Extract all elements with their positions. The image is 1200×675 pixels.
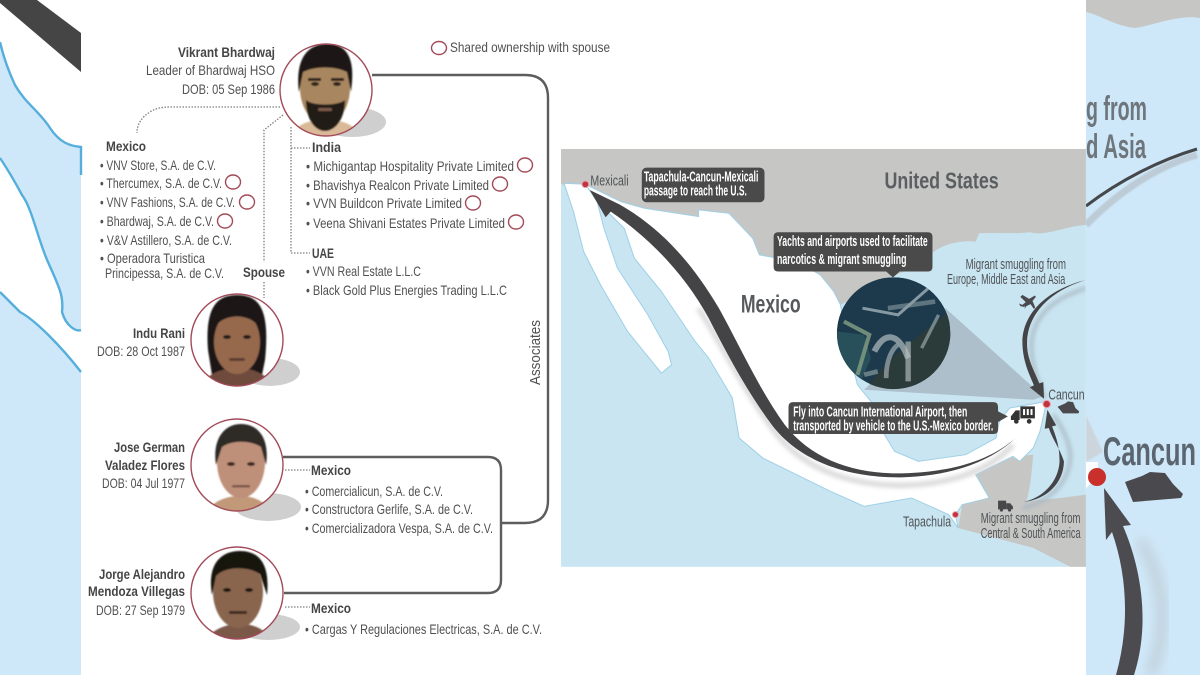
name and birth date: DOB: 27 Sep 1979 — [96, 602, 185, 618]
list: Valadez Mexico companies — [305, 462, 493, 536]
right background map strip — [1086, 0, 1200, 675]
list: Mexico companies: • Operadora Turistica — [100, 250, 205, 266]
portrait shadow — [240, 358, 300, 386]
portrait — [191, 294, 283, 390]
list: India companies: • VVN Buildcon Private Limited — [306, 195, 462, 211]
list: India companies: India — [312, 139, 341, 155]
callout: fly into Cancun: Fly into Cancun International Airport, then — [793, 404, 967, 420]
list: India companies: • Michigantap Hospitality Private Limited — [306, 158, 514, 174]
name and birth date: Jose German — [114, 439, 185, 455]
callout: yachts and airports: narcotics & migrant smuggling — [777, 252, 906, 268]
icon: truck with people — [1011, 406, 1035, 424]
name and role: DOB: 05 Sep 1986 — [182, 81, 275, 97]
callout: fly into Cancun — [788, 402, 1008, 435]
name and role: Vikrant Bhardwaj — [178, 44, 275, 60]
person: Jorge Alejandro Mendoza Villegas — [88, 547, 300, 642]
callout: yachts and airports — [774, 232, 932, 278]
label: Spouse: Spouse — [243, 264, 285, 280]
enlarged route curve — [1086, 149, 1197, 225]
list: Mexico companies: • VNV Fashions, S.A. de C.V. — [100, 194, 235, 210]
land: United States — [560, 149, 1086, 305]
list: Mexico companies: Principessa, S.A. de C.V. — [105, 265, 224, 281]
name and birth date: Jorge Alejandro — [99, 566, 185, 582]
name and birth date: Indu Rani — [133, 325, 185, 341]
list: India companies: • Veena Shivani Estates Private Limited — [306, 215, 505, 231]
list: Mexico companies: • Thercumex, S.A. de C.V. — [100, 175, 222, 191]
list: UAE companies: UAE — [312, 245, 334, 261]
callout: Tapachula-Cancun-Mexicali passage: passage to reach the U.S. — [644, 184, 747, 200]
portrait — [191, 419, 283, 515]
label: Tapachula: Tapachula — [903, 514, 952, 530]
list: Mendoza Mexico companies: • Cargas Y Regulaciones Electricas, S.A. de C.V. — [305, 621, 542, 637]
person: Indu Rani — [97, 294, 300, 390]
name and birth date — [97, 325, 185, 359]
list: India companies — [306, 139, 532, 231]
dotted connector: to India and UAE holdings — [291, 127, 310, 253]
callout: Tapachula-Cancun-Mexicali passage: Tapachula-Cancun-Mexicali — [644, 170, 758, 186]
icon: airplane — [1019, 295, 1036, 309]
label: migrant smuggling from Central and South America: Migrant smuggling from — [981, 511, 1081, 527]
connector: associates — [372, 75, 548, 523]
list: Valadez Mexico companies: • Comercialicun, S.A. de C.V. — [305, 483, 443, 499]
list: UAE companies: • Black Gold Plus Energies Trading L.L.C — [306, 282, 507, 298]
yacht callout beam — [864, 308, 1043, 400]
list: UAE companies: • VVN Real Estate L.L.C — [306, 263, 421, 279]
callout: fly into Cancun: transported by vehicle to the U.S.-Mexico border. — [793, 419, 993, 435]
panel: smuggling route map — [560, 149, 1086, 567]
label: Cancun: Cancun — [1048, 388, 1085, 404]
label: migrant smuggling from Europe, Middle East and Asia: Europe, Middle East and Asia — [947, 272, 1066, 288]
connector: Valadez and Mendoza — [283, 457, 501, 593]
callout: Tapachula-Cancun-Mexicali passage — [642, 168, 764, 202]
list: Valadez Mexico companies: • Comercializadora Vespa, S.A. de C.V. — [305, 520, 493, 536]
dotted connector: Mendoza to Mexico holdings — [285, 606, 310, 608]
portrait shadow — [236, 614, 300, 640]
list: Valadez Mexico companies: Mexico — [311, 462, 351, 478]
list: Mexico companies — [100, 138, 254, 281]
label: migrant smuggling from Europe, Middle East and Asia — [947, 257, 1066, 288]
label: Mexicali: Mexicali — [590, 174, 629, 190]
enlarged marker: Cancun — [1088, 468, 1106, 486]
legend: shared ownership with spouse: Shared ownership with spouse — [450, 39, 610, 55]
portrait — [191, 547, 283, 642]
name and birth date: Mendoza Villegas — [88, 583, 185, 599]
marker: Mexicali — [582, 181, 589, 188]
list: Mendoza Mexico companies — [305, 600, 542, 637]
name and birth date: Valadez Flores — [105, 457, 185, 473]
portrait shadow — [235, 493, 301, 521]
marker: Cancun — [1043, 400, 1050, 408]
sea — [560, 149, 1086, 567]
label: Mexico: Mexico — [741, 291, 801, 318]
name and birth date — [102, 439, 185, 491]
list: Mexico companies: • V&V Astillero, S.A. de C.V. — [100, 232, 232, 248]
list: Valadez Mexico companies: • Constructora Gerlife, S.A. de C.V. — [305, 501, 473, 517]
name and birth date — [88, 566, 185, 618]
icon: truck small — [998, 501, 1013, 512]
land: Central America — [958, 455, 1086, 567]
land: Baja California — [564, 183, 672, 373]
list: Mexico companies: Mexico — [106, 138, 146, 154]
portrait shadow — [318, 107, 386, 137]
photo: marina aerial view — [837, 277, 952, 390]
person: Vikrant Bhardwaj — [146, 44, 386, 140]
list: UAE companies — [306, 245, 507, 298]
enlarged arrow from south — [1104, 488, 1162, 675]
route arrow: Cancun to Mexicali — [590, 190, 1016, 485]
list: Mexico companies: • Bhardwaj, S.A. de C.V. — [100, 213, 214, 229]
list: Mendoza Mexico companies: Mexico — [311, 600, 351, 616]
dotted connector: Valadez to Mexico holdings — [285, 469, 310, 471]
route arrow: Europe, Middle East and Asia to Cancun — [1022, 280, 1086, 399]
portrait — [280, 44, 372, 140]
label: Associates: Associates — [527, 320, 544, 385]
name and role — [146, 44, 275, 97]
land: Mexico mainland — [585, 184, 1047, 528]
name and birth date: DOB: 28 Oct 1987 — [97, 343, 185, 359]
label: migrant smuggling from Central and South America: Central & South America — [981, 526, 1081, 542]
callout: yachts and airports: Yachts and airports used to facilitate — [777, 234, 928, 250]
enlarged label: Migrant smuggling fragment: g from — [1086, 90, 1147, 128]
enlarged icon: ship — [1125, 472, 1183, 502]
route arrow: Central and South America to Cancun — [1023, 410, 1070, 508]
marker: Tapachula — [952, 512, 959, 518]
enlarged label: Migrant smuggling fragment: d Asia — [1086, 128, 1147, 166]
left background map strip — [0, 0, 81, 675]
list: India companies: • Bhavishya Realcon Private Limited — [306, 177, 489, 193]
label: migrant smuggling from Central and South America — [981, 512, 1081, 538]
list: Mexico companies: • VNV Store, S.A. de C.V. — [100, 157, 216, 173]
person: Jose German Valadez Flores — [102, 419, 301, 521]
name and role: Leader of Bhardwaj HSO — [146, 62, 275, 78]
dotted connector: to Mexico holdings — [137, 107, 280, 133]
icon: ship — [1058, 401, 1079, 413]
dotted connector: to spouse — [264, 115, 283, 298]
enlarged label: Migrant smuggling fragment — [1086, 95, 1146, 158]
name and birth date: DOB: 04 Jul 1977 — [102, 475, 185, 491]
label: migrant smuggling from Europe, Middle East and Asia: Migrant smuggling from — [966, 257, 1066, 273]
label: United States: United States — [884, 167, 999, 193]
